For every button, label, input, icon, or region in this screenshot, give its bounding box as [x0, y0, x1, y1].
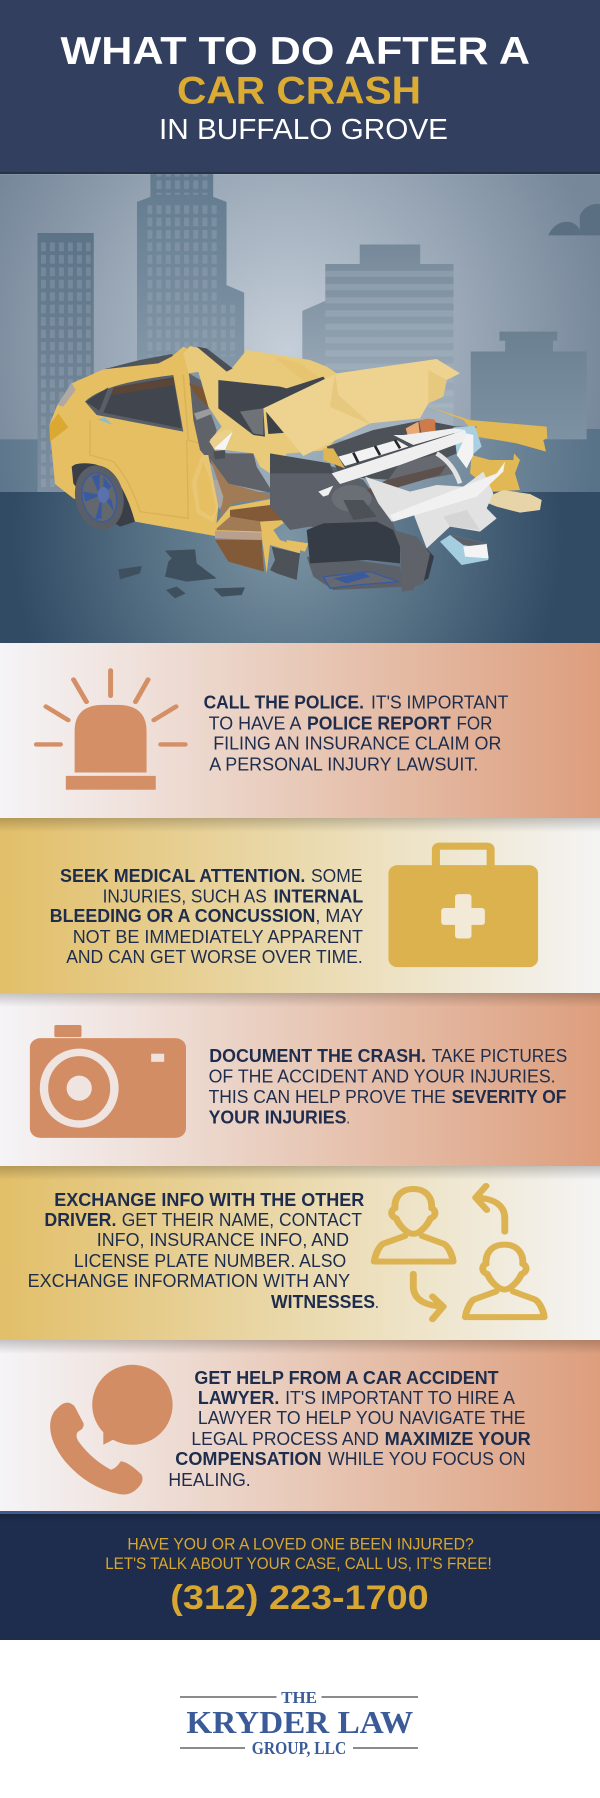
text: document the crash: TAKE PICTURES: [432, 1046, 567, 1066]
text: exchange info: LICENSE PLATE NUMBER. ALSO: [74, 1251, 346, 1271]
icon: first aid kit: [388, 846, 538, 967]
text: get help from a lawyer: LEGAL PROCESS AND: [191, 1429, 379, 1449]
panel 1: call the police: [0, 643, 600, 818]
text: exchange info: DRIVER.: [44, 1210, 116, 1230]
car rear body: [49, 347, 218, 536]
text: seek medical attention: INJURIES, SUCH AS: [103, 886, 267, 906]
front corner panels: [210, 458, 300, 580]
text: seek medical attention: SEEK MEDICAL ATTENTION.: [60, 866, 305, 886]
footer: call to action: [0, 1511, 600, 1640]
text: get help from a lawyer: MAXIMIZE YOUR: [385, 1429, 531, 1449]
text: exchange info: INFO, INSURANCE INFO, AND: [97, 1230, 349, 1250]
logo: kryder law: KRYDER LAW: [186, 1704, 413, 1740]
text: get help from a lawyer: COMPENSATION: [175, 1449, 322, 1469]
crumpled roof and windshield: [183, 346, 360, 477]
text: call the police: IT'S IMPORTANT: [371, 693, 508, 713]
hero illustration: wrecked car in city: [0, 174, 600, 644]
text: document the crash: SEVERITY OF: [452, 1087, 566, 1107]
text: call the police: FILING AN INSURANCE CLAIM OR: [213, 734, 501, 754]
icon: police siren: [36, 670, 185, 790]
logo: group, llc: GROUP, LLC: [252, 1738, 346, 1758]
text: seek medical attention: SOME: [311, 866, 362, 886]
text: seek medical attention: NOT BE IMMEDIATELY APPARENT: [73, 927, 363, 947]
text: get help from a lawyer: IT'S IMPORTANT TO HIRE A: [285, 1388, 515, 1408]
text: document the crash: THIS CAN HELP PROVE THE: [209, 1087, 446, 1107]
text: get help from a lawyer: GET HELP FROM A CAR ACCIDENT: [194, 1368, 499, 1388]
text: document the crash: YOUR INJURIES: [209, 1107, 346, 1127]
car interior and door frame: [189, 373, 273, 523]
text: call the police: TO HAVE A: [209, 714, 301, 734]
text: exchange info: EXCHANGE INFO WITH THE OTHER: [54, 1190, 364, 1210]
text: exchange info: EXCHANGE INFORMATION WITH ANY: [28, 1271, 350, 1291]
panel 4: exchange info: [0, 1166, 600, 1340]
text: get help from a lawyer: HEALING.: [168, 1470, 251, 1490]
text: seek medical attention: BLEEDING OR A CONCUSSION: [50, 906, 315, 926]
icon: camera: [30, 1025, 186, 1138]
text: document the crash: DOCUMENT THE CRASH.: [209, 1046, 426, 1066]
header: title banner: [0, 0, 600, 174]
subtitle: in buffalo grove: IN BUFFALO GROVE: [159, 114, 448, 146]
text: seek medical attention: AND CAN GET WORSE OVER TIME.: [66, 947, 363, 967]
text: document the crash: .: [346, 1107, 350, 1127]
text: exchange info: .: [375, 1292, 379, 1312]
debris on road: [118, 549, 245, 598]
text: get help from a lawyer: LAWYER TO HELP YOU NAVIGATE THE: [198, 1408, 526, 1428]
panel 2: seek medical attention: [0, 818, 600, 993]
cta line 1: HAVE YOU OR A LOVED ONE BEEN INJURED?: [127, 1534, 474, 1554]
text: exchange info: GET THEIR NAME, CONTACT: [122, 1210, 362, 1230]
text: call the police: POLICE REPORT: [307, 714, 451, 734]
logo: the kryder law group: [180, 1688, 418, 1758]
car front: engine, bumper, tire: [263, 359, 547, 592]
phone number: (312) 223-1700: [170, 1579, 429, 1617]
text: document the crash: OF THE ACCIDENT AND YOUR INJURIES.: [209, 1066, 556, 1086]
text: call the police: A PERSONAL INJURY LAWSUIT.: [209, 754, 478, 774]
panel 5: get help from a lawyer: [0, 1340, 600, 1512]
crashed car and debris: [49, 346, 547, 598]
text: get help from a lawyer: WHILE YOU FOCUS ON: [328, 1449, 526, 1469]
cta line 2: LET'S TALK ABOUT YOUR CASE, CALL US, IT'S FREE!: [105, 1554, 492, 1573]
title line: car crash: CAR CRASH: [177, 70, 421, 113]
text: seek medical attention: , MAY: [315, 906, 363, 926]
text: exchange info: WITNESSES: [271, 1292, 375, 1312]
skyline buildings: [0, 174, 600, 644]
panel 3: document the crash: [0, 993, 600, 1166]
text: call the police: FOR: [456, 714, 492, 734]
icon: phone with speech bubble: [50, 1365, 173, 1495]
city backdrop: [0, 174, 600, 644]
icon: two people exchanging info: [374, 1186, 544, 1319]
logo: the: THE: [281, 1688, 317, 1707]
text: seek medical attention: INTERNAL: [274, 886, 363, 906]
title line: what to do after a: WHAT TO DO AFTER A: [60, 30, 530, 73]
text: call the police: CALL THE POLICE.: [204, 693, 364, 713]
text: get help from a lawyer: LAWYER.: [198, 1388, 279, 1408]
